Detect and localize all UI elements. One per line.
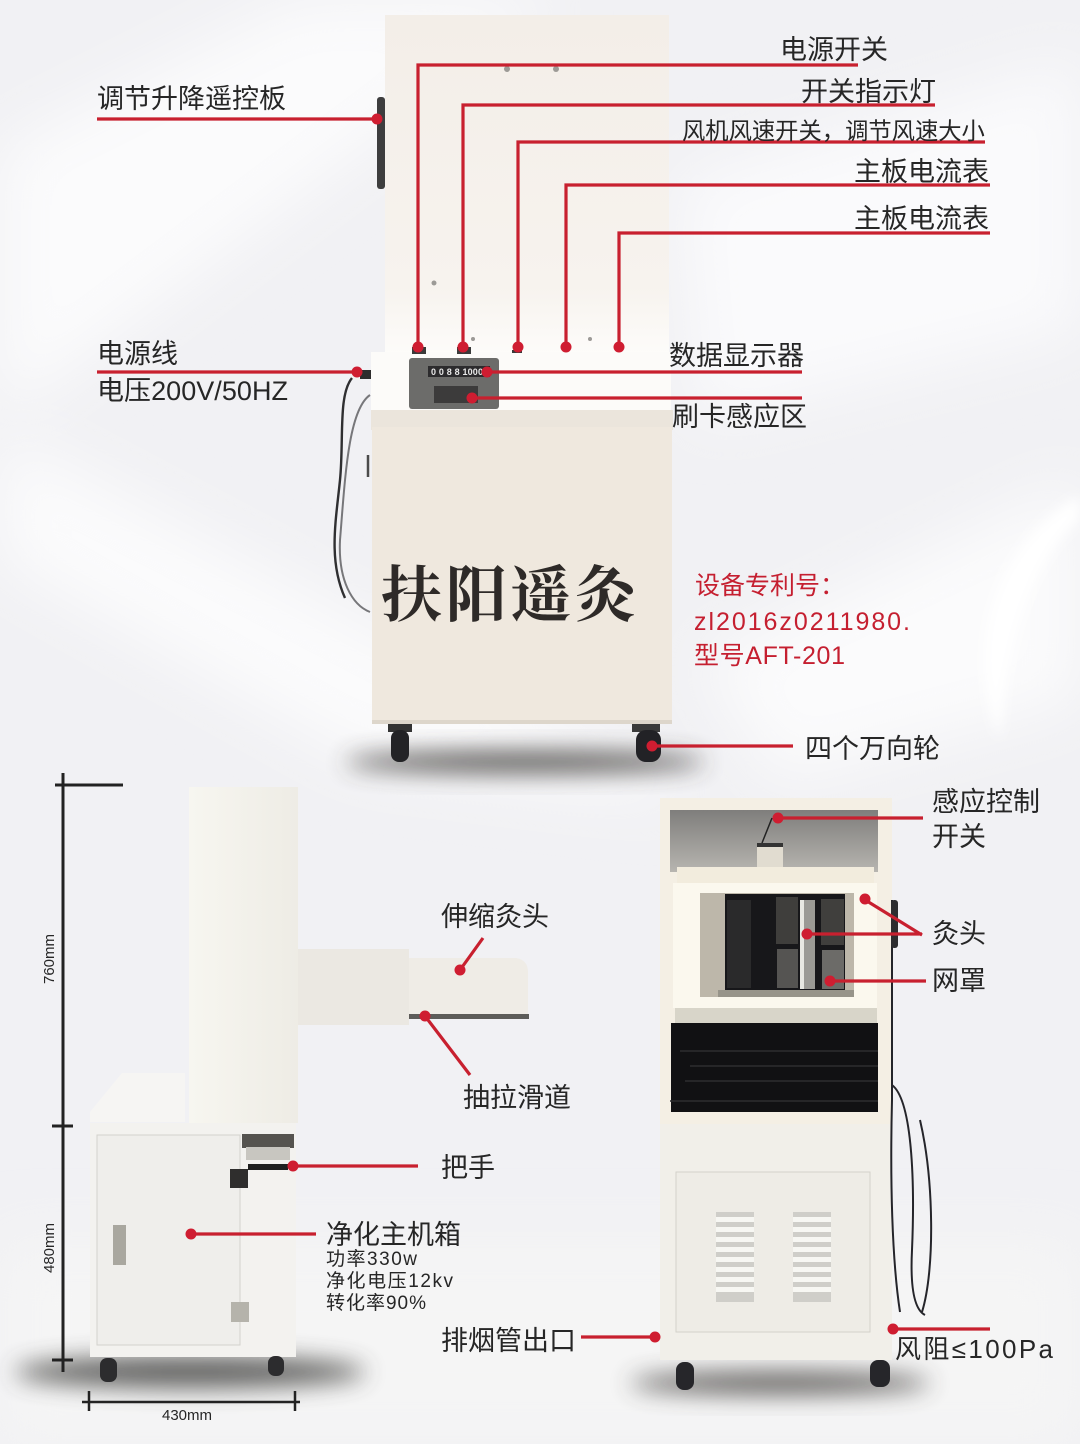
- black louvre: [670, 1023, 878, 1112]
- calligraphy title: 扶阳遥灸: [381, 547, 637, 634]
- door: [97, 1135, 240, 1345]
- purifier spec block: 净化电压12kv: [326, 1270, 454, 1292]
- label: fan speed switch: 风机风速开关，调节风速大小: [682, 118, 985, 144]
- back frame: [677, 867, 874, 885]
- shelf: [371, 352, 671, 410]
- label: card reader: 刷卡感应区: [672, 402, 807, 432]
- patent block: 设备专利号：: [695, 572, 845, 600]
- label: induction switch: 开关: [932, 822, 986, 852]
- label: voltage: 电压200V/50HZ: [97, 376, 288, 406]
- label: mesh: 网罩: [932, 966, 986, 996]
- card display panel: 0 0 8 8 1000: [431, 367, 483, 377]
- moxibustion head: [409, 958, 528, 1018]
- floor shadow: back machine: [630, 1372, 930, 1394]
- label: slide rail: 抽拉滑道: [463, 1083, 571, 1113]
- label: telescopic head: 伸缩灸头: [441, 902, 549, 932]
- label: power switch: 电源开关: [780, 35, 888, 65]
- floor shadow: side machine: [15, 1356, 365, 1388]
- upper panel: [385, 15, 669, 355]
- lower cabinet body: [372, 427, 672, 723]
- left vents: [716, 1212, 754, 1302]
- hinge bar: [675, 1008, 877, 1023]
- cords: [891, 900, 931, 1315]
- column: [189, 787, 298, 1123]
- inner chamber: [670, 810, 878, 872]
- arm: [298, 949, 409, 1025]
- moxibustion blocks: [727, 897, 844, 989]
- back machine: [660, 798, 931, 1390]
- induction switch: [757, 818, 783, 867]
- purifier spec block: [326, 1220, 461, 1314]
- mesh frame bottom: [718, 990, 854, 997]
- back wheels: [676, 1360, 890, 1390]
- card display panel: [409, 358, 499, 409]
- label: wind resistance: 风阻≤100Pa: [895, 1334, 1054, 1364]
- sloped back: [90, 1073, 185, 1122]
- remote control board: [377, 97, 385, 189]
- label: data display: 数据显示器: [669, 341, 804, 371]
- dimension: 760mm: 760mm: [41, 934, 58, 984]
- power cords: [335, 378, 370, 612]
- label: remote lift board: 调节升降遥控板: [97, 84, 286, 114]
- side machine: [90, 787, 529, 1382]
- window: [700, 893, 854, 997]
- carry handle: [242, 1134, 294, 1170]
- hinge top: [230, 1169, 248, 1188]
- label: casters: 四个万向轮: [805, 734, 940, 764]
- purifier spec block: 功率330w: [326, 1248, 417, 1270]
- side wheels: [100, 1356, 284, 1382]
- switches: [412, 347, 522, 354]
- label: moxa head: 灸头: [932, 919, 986, 949]
- slide rail: [409, 1014, 529, 1019]
- outer shell: [660, 798, 892, 1126]
- power plug: [360, 370, 371, 379]
- cabinet: [90, 1123, 296, 1357]
- panel screws: [432, 66, 592, 341]
- dimension: 480mm: 480mm: [41, 1223, 58, 1273]
- access panel: [676, 1172, 870, 1332]
- hinge bottom: [231, 1302, 249, 1322]
- label: handle: 把手: [441, 1153, 495, 1183]
- label: power cord: 电源线: [97, 339, 178, 369]
- door handle: [113, 1225, 126, 1265]
- right vents: [793, 1212, 831, 1302]
- side handle: [891, 900, 898, 948]
- side latch: [367, 455, 369, 477]
- label: smoke outlet: 排烟管出口: [441, 1326, 576, 1356]
- purifier spec block: 净化主机箱: [326, 1220, 461, 1250]
- patent block: zl2016z0211980.: [694, 608, 910, 636]
- label: induction switch: [932, 787, 1040, 852]
- purifier spec block: 转化率90%: [326, 1292, 426, 1314]
- dimension lines: [52, 773, 300, 1411]
- patent block: [694, 572, 910, 670]
- right front wheel: [632, 724, 661, 762]
- lower cabinet lid: [371, 410, 673, 430]
- left front wheel: [388, 724, 412, 762]
- patent block: 型号AFT-201: [694, 642, 845, 670]
- callout leaders: [97, 65, 990, 1342]
- floor shadow: top machine: [345, 751, 705, 773]
- lower cabinet: [660, 1124, 892, 1360]
- label: indicator lamp: 开关指示灯: [801, 77, 936, 107]
- front machine: [335, 15, 673, 762]
- front frame: [673, 883, 877, 1008]
- dimension: 430mm: 430mm: [162, 1407, 212, 1424]
- label: induction switch: 感应控制: [932, 787, 1040, 817]
- black interior: [725, 894, 845, 990]
- label: ammeter 1: 主板电流表: [854, 157, 989, 187]
- cabinet bottom edge: [372, 720, 672, 724]
- label: ammeter 2: 主板电流表: [854, 204, 989, 234]
